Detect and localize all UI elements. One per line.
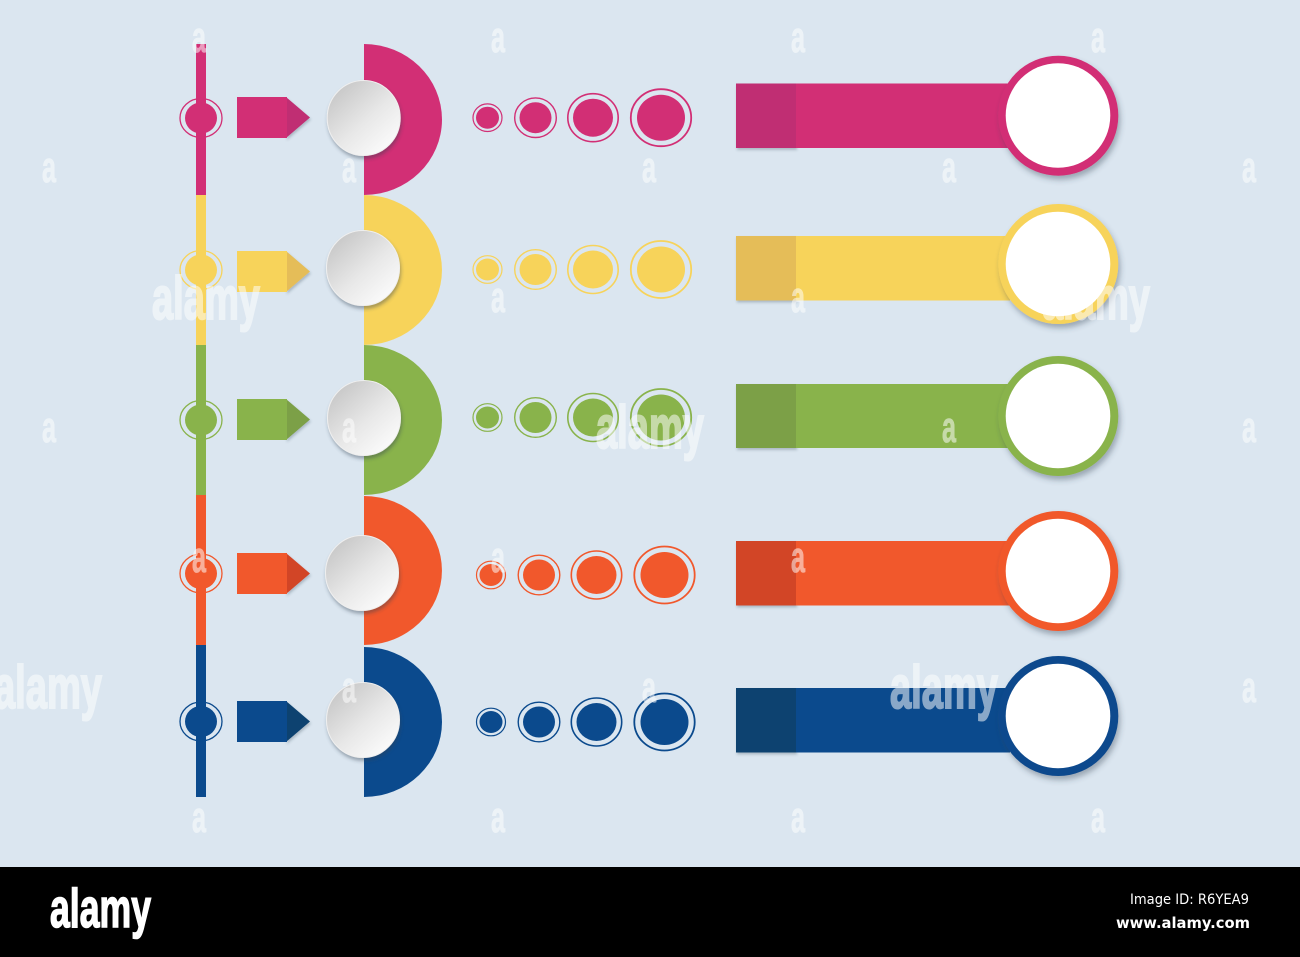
- arrow: [237, 399, 310, 440]
- timeline segment with node: [180, 495, 222, 645]
- badge: [998, 511, 1118, 631]
- row 2: yellow: [180, 195, 1118, 345]
- badge: [998, 56, 1118, 176]
- banner: [736, 688, 1010, 752]
- half ring: [364, 345, 442, 495]
- badge: [998, 204, 1118, 324]
- watermarks: a: [1091, 13, 1105, 62]
- banner: [736, 84, 1010, 148]
- banner: [736, 541, 1010, 606]
- timeline segment with node: [180, 44, 222, 195]
- watermarks: a: [942, 403, 956, 452]
- watermarks: a: [1242, 663, 1256, 712]
- watermarks: a: [342, 403, 356, 452]
- badge: [998, 356, 1118, 476]
- growing dots: [476, 546, 695, 604]
- button: [326, 682, 400, 758]
- image id: Image ID: R6YEA9: [1130, 892, 1249, 908]
- banner: [736, 236, 1010, 300]
- row 3: green: [180, 345, 1118, 495]
- site url: www.alamy.com: [1116, 914, 1250, 932]
- button: [328, 380, 400, 456]
- arrow: [237, 701, 310, 742]
- watermarks: a: [642, 663, 656, 712]
- watermarks: a: [791, 273, 805, 322]
- timeline segment with node: [180, 345, 222, 495]
- timeline segment with node: [180, 645, 222, 797]
- watermarks: a: [791, 533, 805, 582]
- watermarks: a: [1242, 403, 1256, 452]
- watermarks: a: [342, 143, 356, 192]
- footer bar: [0, 867, 1300, 957]
- row 5: blue: [180, 645, 1118, 797]
- button: [326, 536, 398, 610]
- watermarks: a: [42, 403, 56, 452]
- arrow: [237, 97, 310, 138]
- arrow: [237, 553, 310, 594]
- watermarks: a: [942, 143, 956, 192]
- watermarks: a: [192, 793, 206, 842]
- half ring: [364, 44, 442, 195]
- badge: [998, 656, 1118, 776]
- watermarks: alamy: [596, 394, 704, 461]
- watermarks: a: [1091, 793, 1105, 842]
- growing dots: [473, 241, 691, 298]
- button: [326, 230, 400, 306]
- footer logo: alamy: [50, 877, 151, 939]
- growing dots: [476, 694, 695, 750]
- watermarks: a: [491, 13, 505, 62]
- watermarks: a: [491, 533, 505, 582]
- watermarks: a: [192, 13, 206, 62]
- watermarks: alamy: [890, 654, 998, 721]
- button: [327, 80, 400, 156]
- watermarks: alamy: [1042, 265, 1150, 332]
- half ring: [364, 647, 442, 797]
- watermarks: a: [342, 663, 356, 712]
- watermarks: a: [192, 533, 206, 582]
- watermarks: a: [1242, 143, 1256, 192]
- growing dots: [473, 389, 691, 446]
- row 1: pink: [180, 44, 1118, 195]
- half ring: [364, 496, 442, 645]
- watermarks: a: [1091, 533, 1105, 582]
- watermarks: a: [642, 143, 656, 192]
- row 4: orange: [180, 495, 1118, 645]
- watermarks: a: [42, 143, 56, 192]
- growing dots: [473, 89, 691, 146]
- watermarks: a: [791, 13, 805, 62]
- watermarks: a: [491, 793, 505, 842]
- watermarks: a: [791, 793, 805, 842]
- half ring: [364, 195, 442, 345]
- timeline segment with node: [180, 195, 222, 345]
- watermarks: a: [491, 273, 505, 322]
- banner: [736, 384, 1010, 448]
- watermarks: alamy: [152, 265, 260, 332]
- arrow: [237, 251, 310, 292]
